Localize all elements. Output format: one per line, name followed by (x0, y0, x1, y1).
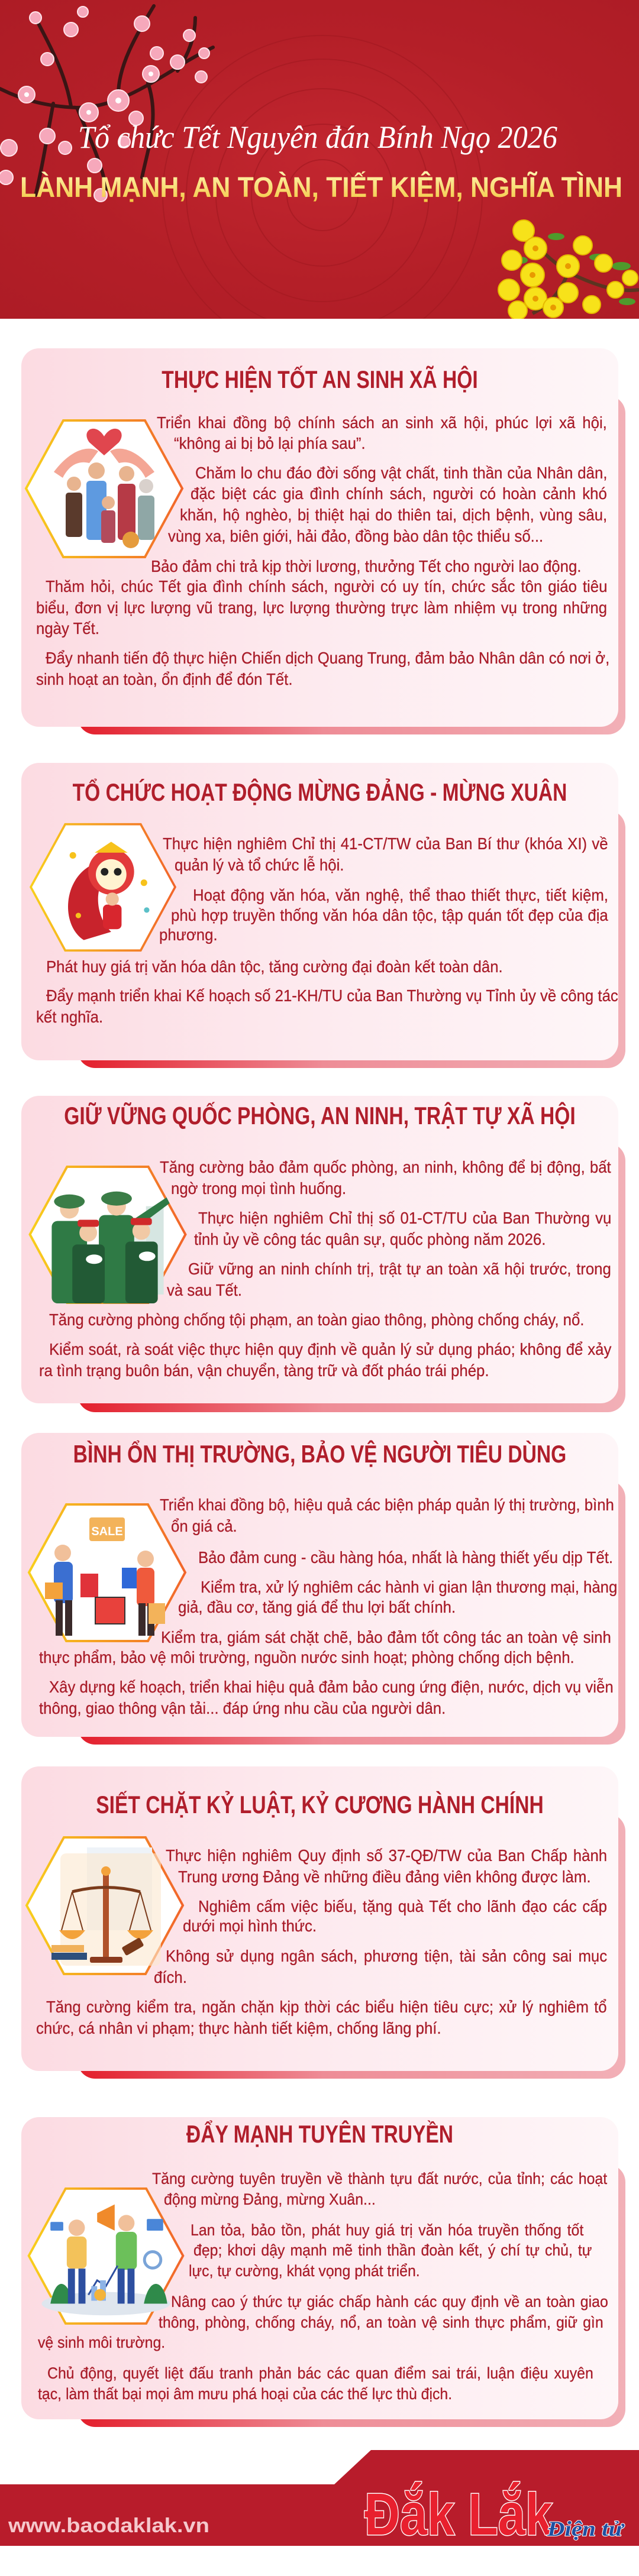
panel 5: kỷ luật kỷ cương: Thực hiện nghiêm Quy định số 37-QĐ/TW của Ban Chấp hành (166, 1846, 607, 1865)
text block 6 (38, 2170, 608, 2403)
panel 4: bình ổn thị trường: Kiểm tra, giám sát chặt chẽ, bảo đảm tốt công tác an toàn vệ sinh (161, 1628, 611, 1646)
panel 2: mừng Đảng mừng Xuân: Hoạt động văn hóa, văn nghệ, thể thao thiết thực, tiết kiệm, (193, 886, 608, 904)
panel 4: bình ổn thị trường: Triển khai đồng bộ, hiệu quả các biện pháp quản lý thị trường, bình (160, 1496, 614, 1514)
panel 4: bình ổn thị trường: thực phẩm, bảo vệ môi trường, nguồn nước sinh hoạt; phòng chống dịch bệnh. (39, 1648, 575, 1666)
icon: lion dance (30, 823, 176, 952)
panel 1: an sinh xã hội: khăn, hộ nghèo, bị thiệt hại do thiên tai, dịch bệnh, vùng sâu, (180, 506, 607, 524)
panel 6: tuyên truyền: Lan tỏa, bảo tồn, phát huy giá trị văn hóa truyền thống tốt (191, 2221, 583, 2239)
panel 1: an sinh xã hội: sinh hoạt an toàn, ổn định để đón Tết. (36, 670, 292, 688)
text block 3 (39, 1158, 612, 1380)
panel 5: kỷ luật kỷ cương: đích. (154, 1968, 187, 1986)
panel 1: an sinh xã hội (21, 348, 625, 734)
panel 4: bình ổn thị trường: Bảo đảm cung - cầu hàng hóa, nhất là hàng thiết yếu dịp Tết. (198, 1548, 613, 1567)
panel 3: quốc phòng an ninh: Tăng cường phòng chống tội phạm, an toàn giao thông, phòng chống cháy, nổ. (49, 1310, 584, 1329)
panel 2: mừng Đảng mừng Xuân: Đẩy mạnh triển khai Kế hoạch số 21-KH/TU của Ban Thường vụ Tỉnh ủy về công tác (46, 986, 618, 1005)
footer band (0, 2450, 639, 2548)
panel 3: quốc phòng an ninh: và sau Tết. (167, 1281, 242, 1299)
plum blossom branch (0, 6, 213, 202)
panel 4: bình ổn thị trường: Xây dựng kế hoạch, triển khai hiệu quả đảm bảo cung ứng điện, nước, dịch vụ viễn (49, 1678, 614, 1696)
heading 2: TỔ CHỨC HOẠT ĐỘNG MỪNG ĐẢNG - MỪNG XUÂN (73, 778, 567, 806)
panel 1: an sinh xã hội: Triển khai đồng bộ chính sách an sinh xã hội, phúc lợi xã hội, (157, 413, 607, 432)
panel 4: bình ổn thị trường: thông, giao thông vận tải... đáp ứng nhu cầu của người dân. (39, 1699, 446, 1717)
heading 5: SIẾT CHẶT KỶ LUẬT, KỶ CƯƠNG HÀNH CHÍNH (96, 1791, 544, 1818)
icon: shopping (27, 1503, 187, 1642)
icon: family with heart (25, 419, 183, 558)
panel 6: tuyên truyền: tạc, làm thất bại mọi âm mưu phá hoại của các thế lực thù địch. (38, 2385, 452, 2403)
panel 4: bình ổn thị trường: ổn giá cả. (171, 1517, 237, 1535)
panel 2: mừng Đảng mừng Xuân (21, 763, 625, 1068)
panel 3: quốc phòng an ninh: Giữ vững an ninh chính trị, trật tự an toàn xã hội trước, trong (188, 1260, 611, 1278)
icon: soldiers (28, 1166, 187, 1304)
text block 2 (36, 834, 618, 1027)
text block 4 (39, 1496, 617, 1717)
panel 2: mừng Đảng mừng Xuân: quản lý và tổ chức lễ hội. (175, 856, 344, 874)
panel 5: kỷ luật kỷ cương: Nghiêm cấm việc biếu, tặng quà Tết cho lãnh đạo các cấp (198, 1897, 607, 1915)
panel 3: quốc phòng an ninh: ra tình trạng buôn bán, vận chuyển, tàng trữ và đốt pháo trái phép. (39, 1361, 489, 1380)
panel 6: tuyên truyền: động mừng Đảng, mừng Xuân... (164, 2190, 376, 2208)
panel 6: tuyên truyền: Chủ động, quyết liệt đấu tranh phản bác các quan điểm sai trái, luận điệu xuyên (47, 2364, 593, 2382)
panel 3: quốc phòng an ninh: ngờ trong mọi tình huống. (171, 1179, 346, 1198)
panel 1: an sinh xã hội: “không ai bị bỏ lại phía sau”. (174, 434, 366, 452)
header banner (0, 0, 639, 319)
text block 1 (36, 413, 609, 688)
panel 3: quốc phòng an ninh: Thực hiện nghiêm Chỉ thị số 01-CT/TU của Ban Thường vụ (198, 1209, 611, 1227)
panel 2: mừng Đảng mừng Xuân: Phát huy giá trị văn hóa dân tộc, tăng cường đại đoàn kết toàn dân. (46, 957, 503, 976)
icon: scales of justice (25, 1836, 185, 1975)
panel 2: mừng Đảng mừng Xuân: kết nghĩa. (36, 1008, 103, 1026)
panel 4: bình ổn thị trường: giả, đầu cơ, tăng giá để thu lợi bất chính. (178, 1598, 456, 1616)
heading 6: ĐẨY MẠNH TUYÊN TRUYỀN (186, 2120, 453, 2148)
icon: shopping: SALE (91, 1525, 123, 1538)
panel 2: mừng Đảng mừng Xuân: Thực hiện nghiêm Chỉ thị 41-CT/TW của Ban Bí thư (khóa XI) về (163, 834, 608, 853)
panel 3: quốc phòng an ninh (21, 1096, 625, 1412)
script title: Tổ chức Tết Nguyên đán Bính Ngọ 2026 (78, 119, 557, 155)
heading 3: GIỮ VỮNG QUỐC PHÒNG, AN NINH, TRẬT TỰ XÃ HỘI (64, 1102, 576, 1130)
panel 5: kỷ luật kỷ cương: Tăng cường kiểm tra, ngăn chặn kịp thời các biểu hiện tiêu cực; xử lý nghiêm tổ (46, 1998, 607, 2016)
panel 6: tuyên truyền (21, 2117, 625, 2427)
panel 3: quốc phòng an ninh: Kiểm soát, rà soát việc thực hiện quy định về quản lý sử dụng pháo; không để xảy (49, 1340, 611, 1358)
panel 1: an sinh xã hội: Đẩy nhanh tiến độ thực hiện Chiến dịch Quang Trung, đảm bảo Nhân dân có nơi ở, (46, 649, 609, 667)
panel 1: an sinh xã hội: ngày Tết. (36, 619, 99, 637)
panel 6: tuyên truyền: Tăng cường tuyên truyền về thành tựu đất nước, của tỉnh; các hoạt (152, 2170, 607, 2187)
logo: Điện tử (547, 2517, 625, 2541)
panel 2: mừng Đảng mừng Xuân: phù hợp truyền thống văn hóa dân tộc, tập quán tốt đẹp của địa (171, 906, 608, 924)
heading 4: BÌNH ỔN THỊ TRƯỜNG, BẢO VỆ NGƯỜI TIÊU DÙNG (73, 1440, 566, 1468)
panel 2: mừng Đảng mừng Xuân: phương. (159, 925, 218, 944)
panel 6: tuyên truyền: Nâng cao ý thức tự giác chấp hành các quy định về an toàn giao (171, 2293, 608, 2310)
panel 6: tuyên truyền: lực, tự cường, khát vọng phát triển. (189, 2262, 420, 2280)
panel 1: an sinh xã hội: vùng xa, biên giới, hải đảo, đồng bào dân tộc thiểu số... (168, 527, 543, 545)
panel 3: quốc phòng an ninh: Tăng cường bảo đảm quốc phòng, an ninh, không để bị động, bất (160, 1158, 611, 1176)
panel 5: kỷ luật kỷ cương: Không sử dụng ngân sách, phương tiện, tài sản công sai mục (166, 1947, 607, 1965)
panel 5: kỷ luật kỷ cương: chức, cá nhân vi phạm; thực hành tiết kiệm, chống lãng phí. (36, 2019, 441, 2037)
panel 5: kỷ luật kỷ cương: Trung ương Đảng về những điều đảng viên không được làm. (178, 1868, 591, 1886)
apricot blossom (498, 220, 639, 320)
panel 1: an sinh xã hội: Thăm hỏi, chúc Tết gia đình chính sách, người có uy tín, chức sắc tôn giáo tiêu (46, 577, 607, 596)
panel 1: an sinh xã hội: biểu, đơn vị lực lượng vũ trang, lực lượng thường trực làm nhiệm vụ trong những (36, 598, 607, 617)
panel 1: an sinh xã hội: Bảo đảm chi trả kịp thời lương, thưởng Tết cho người lao động. (151, 557, 581, 575)
panel 5: kỷ luật kỷ cương (21, 1766, 625, 2079)
website url: www.baodaklak.vn (8, 2514, 209, 2537)
panel 1: an sinh xã hội: Chăm lo chu đáo đời sống vật chất, tinh thần của Nhân dân, (195, 464, 607, 482)
icon: megaphone communication (27, 2187, 185, 2325)
panel 1: an sinh xã hội: đặc biệt các gia đình chính sách, người có hoàn cảnh khó (191, 484, 607, 503)
panel 6: tuyên truyền: đẹp; khơi dậy mạnh mẽ tinh thần đoàn kết, ý chí tự chủ, tự (193, 2241, 592, 2259)
heading 1: THỰC HIỆN TỐT AN SINH XÃ HỘI (162, 365, 478, 393)
panel 6: tuyên truyền: vệ sinh môi trường. (38, 2334, 165, 2351)
panel 4: bình ổn thị trường (21, 1433, 625, 1745)
panel 6: tuyên truyền: thông, phòng, chống cháy, nổ, an toàn vệ sinh thực phẩm, giữ gìn (159, 2313, 604, 2331)
text block 5 (36, 1846, 607, 2038)
logo: Đắk Lắk (364, 2481, 553, 2548)
panel 5: kỷ luật kỷ cương: dưới mọi hình thức. (183, 1917, 317, 1935)
panel 4: bình ổn thị trường: Kiểm tra, xử lý nghiêm các hành vi gian lận thương mại, hàng (201, 1578, 617, 1596)
panel 3: quốc phòng an ninh: tỉnh ủy về công tác quân sự, quốc phòng năm 2026. (194, 1230, 546, 1248)
